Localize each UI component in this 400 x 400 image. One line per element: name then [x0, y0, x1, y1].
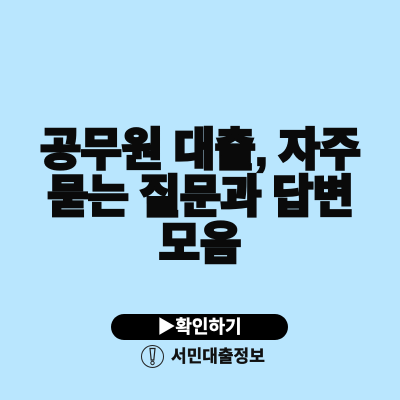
brand: 서민대출정보 [141, 345, 265, 368]
button: 확인하기: ▶확인하기 [157, 317, 242, 337]
button: 확인하기 [111, 314, 288, 340]
icon: exclamation circle [141, 345, 164, 368]
brand name: 서민대출정보 [171, 347, 265, 366]
title: 공무원 대출, 자주 [40, 124, 360, 175]
title: 모음 [159, 218, 241, 269]
title [40, 124, 360, 269]
title: 묻는 질문과 답변 [47, 171, 353, 222]
